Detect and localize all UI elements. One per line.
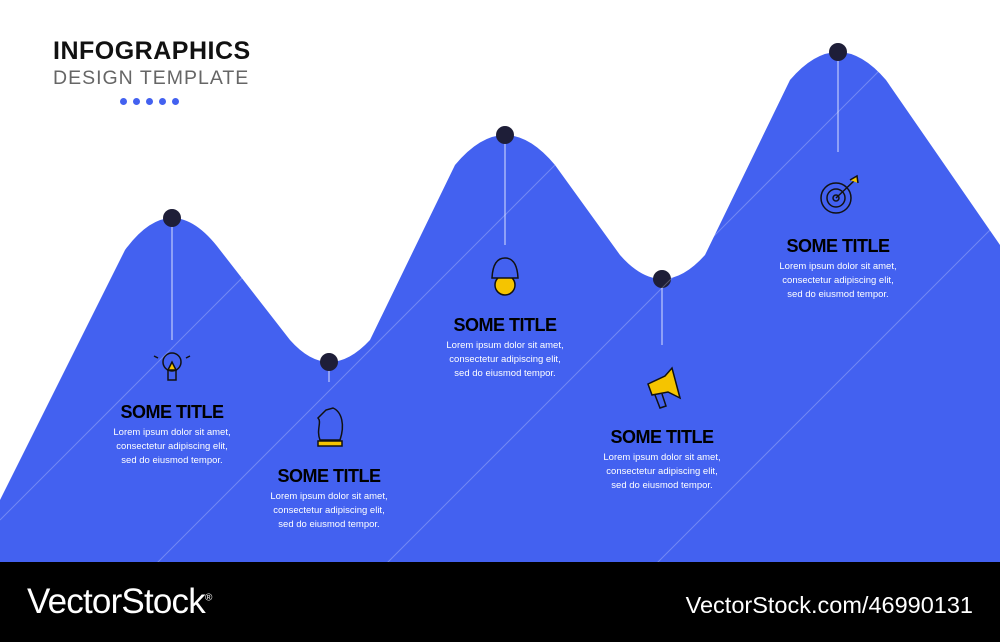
text: step 3: Lorem ipsum dolor sit amet, <box>446 340 564 351</box>
text: step 5: consectetur adipiscing elit, <box>782 275 894 286</box>
text: step 1 <box>113 402 231 466</box>
footer bar: VectorStock.com/46990131 <box>686 592 973 618</box>
text: step 1: sed do eiusmod tempor. <box>121 455 223 466</box>
title: DESIGN TEMPLATE <box>53 67 249 89</box>
text: step 5 <box>779 236 897 300</box>
dots <box>163 43 847 371</box>
text: step 4: Lorem ipsum dolor sit amet, <box>603 452 721 463</box>
dots decoration <box>120 98 179 105</box>
text: step 1: consectetur adipiscing elit, <box>116 441 228 452</box>
icon: bulb <box>154 353 190 380</box>
icon: target <box>821 176 858 213</box>
text: step 3: sed do eiusmod tempor. <box>454 368 556 379</box>
mountain shape <box>0 52 1000 562</box>
text: step 1: SOME TITLE <box>120 402 224 422</box>
text: step 4: consectetur adipiscing elit, <box>606 466 718 477</box>
title <box>53 37 251 105</box>
icon: helmet gear <box>492 258 518 295</box>
icon: megaphone <box>648 368 680 408</box>
text: step 2: SOME TITLE <box>278 466 380 486</box>
text: step 3: SOME TITLE <box>454 315 556 335</box>
text: step 3 <box>446 315 564 379</box>
text: step 4 <box>603 427 721 491</box>
text: step 2: consectetur adipiscing elit, <box>273 505 385 516</box>
text: step 3: consectetur adipiscing elit, <box>449 354 561 365</box>
footer bar <box>0 562 1000 642</box>
text: step 5: SOME TITLE <box>786 236 890 256</box>
footer bar: VectorStock® <box>27 582 212 621</box>
text: step 4: sed do eiusmod tempor. <box>611 480 713 491</box>
text: step 2: Lorem ipsum dolor sit amet, <box>270 491 388 502</box>
text: step 4: SOME TITLE <box>610 427 714 447</box>
text: step 2 <box>270 466 388 530</box>
text: step 1: Lorem ipsum dolor sit amet, <box>113 427 231 438</box>
title: INFOGRAPHICS <box>53 37 251 65</box>
connector lines <box>172 52 838 382</box>
text: step 2: sed do eiusmod tempor. <box>278 519 380 530</box>
icon: knight <box>318 408 342 446</box>
text: step 5: Lorem ipsum dolor sit amet, <box>779 261 897 272</box>
text: step 5: sed do eiusmod tempor. <box>787 289 889 300</box>
